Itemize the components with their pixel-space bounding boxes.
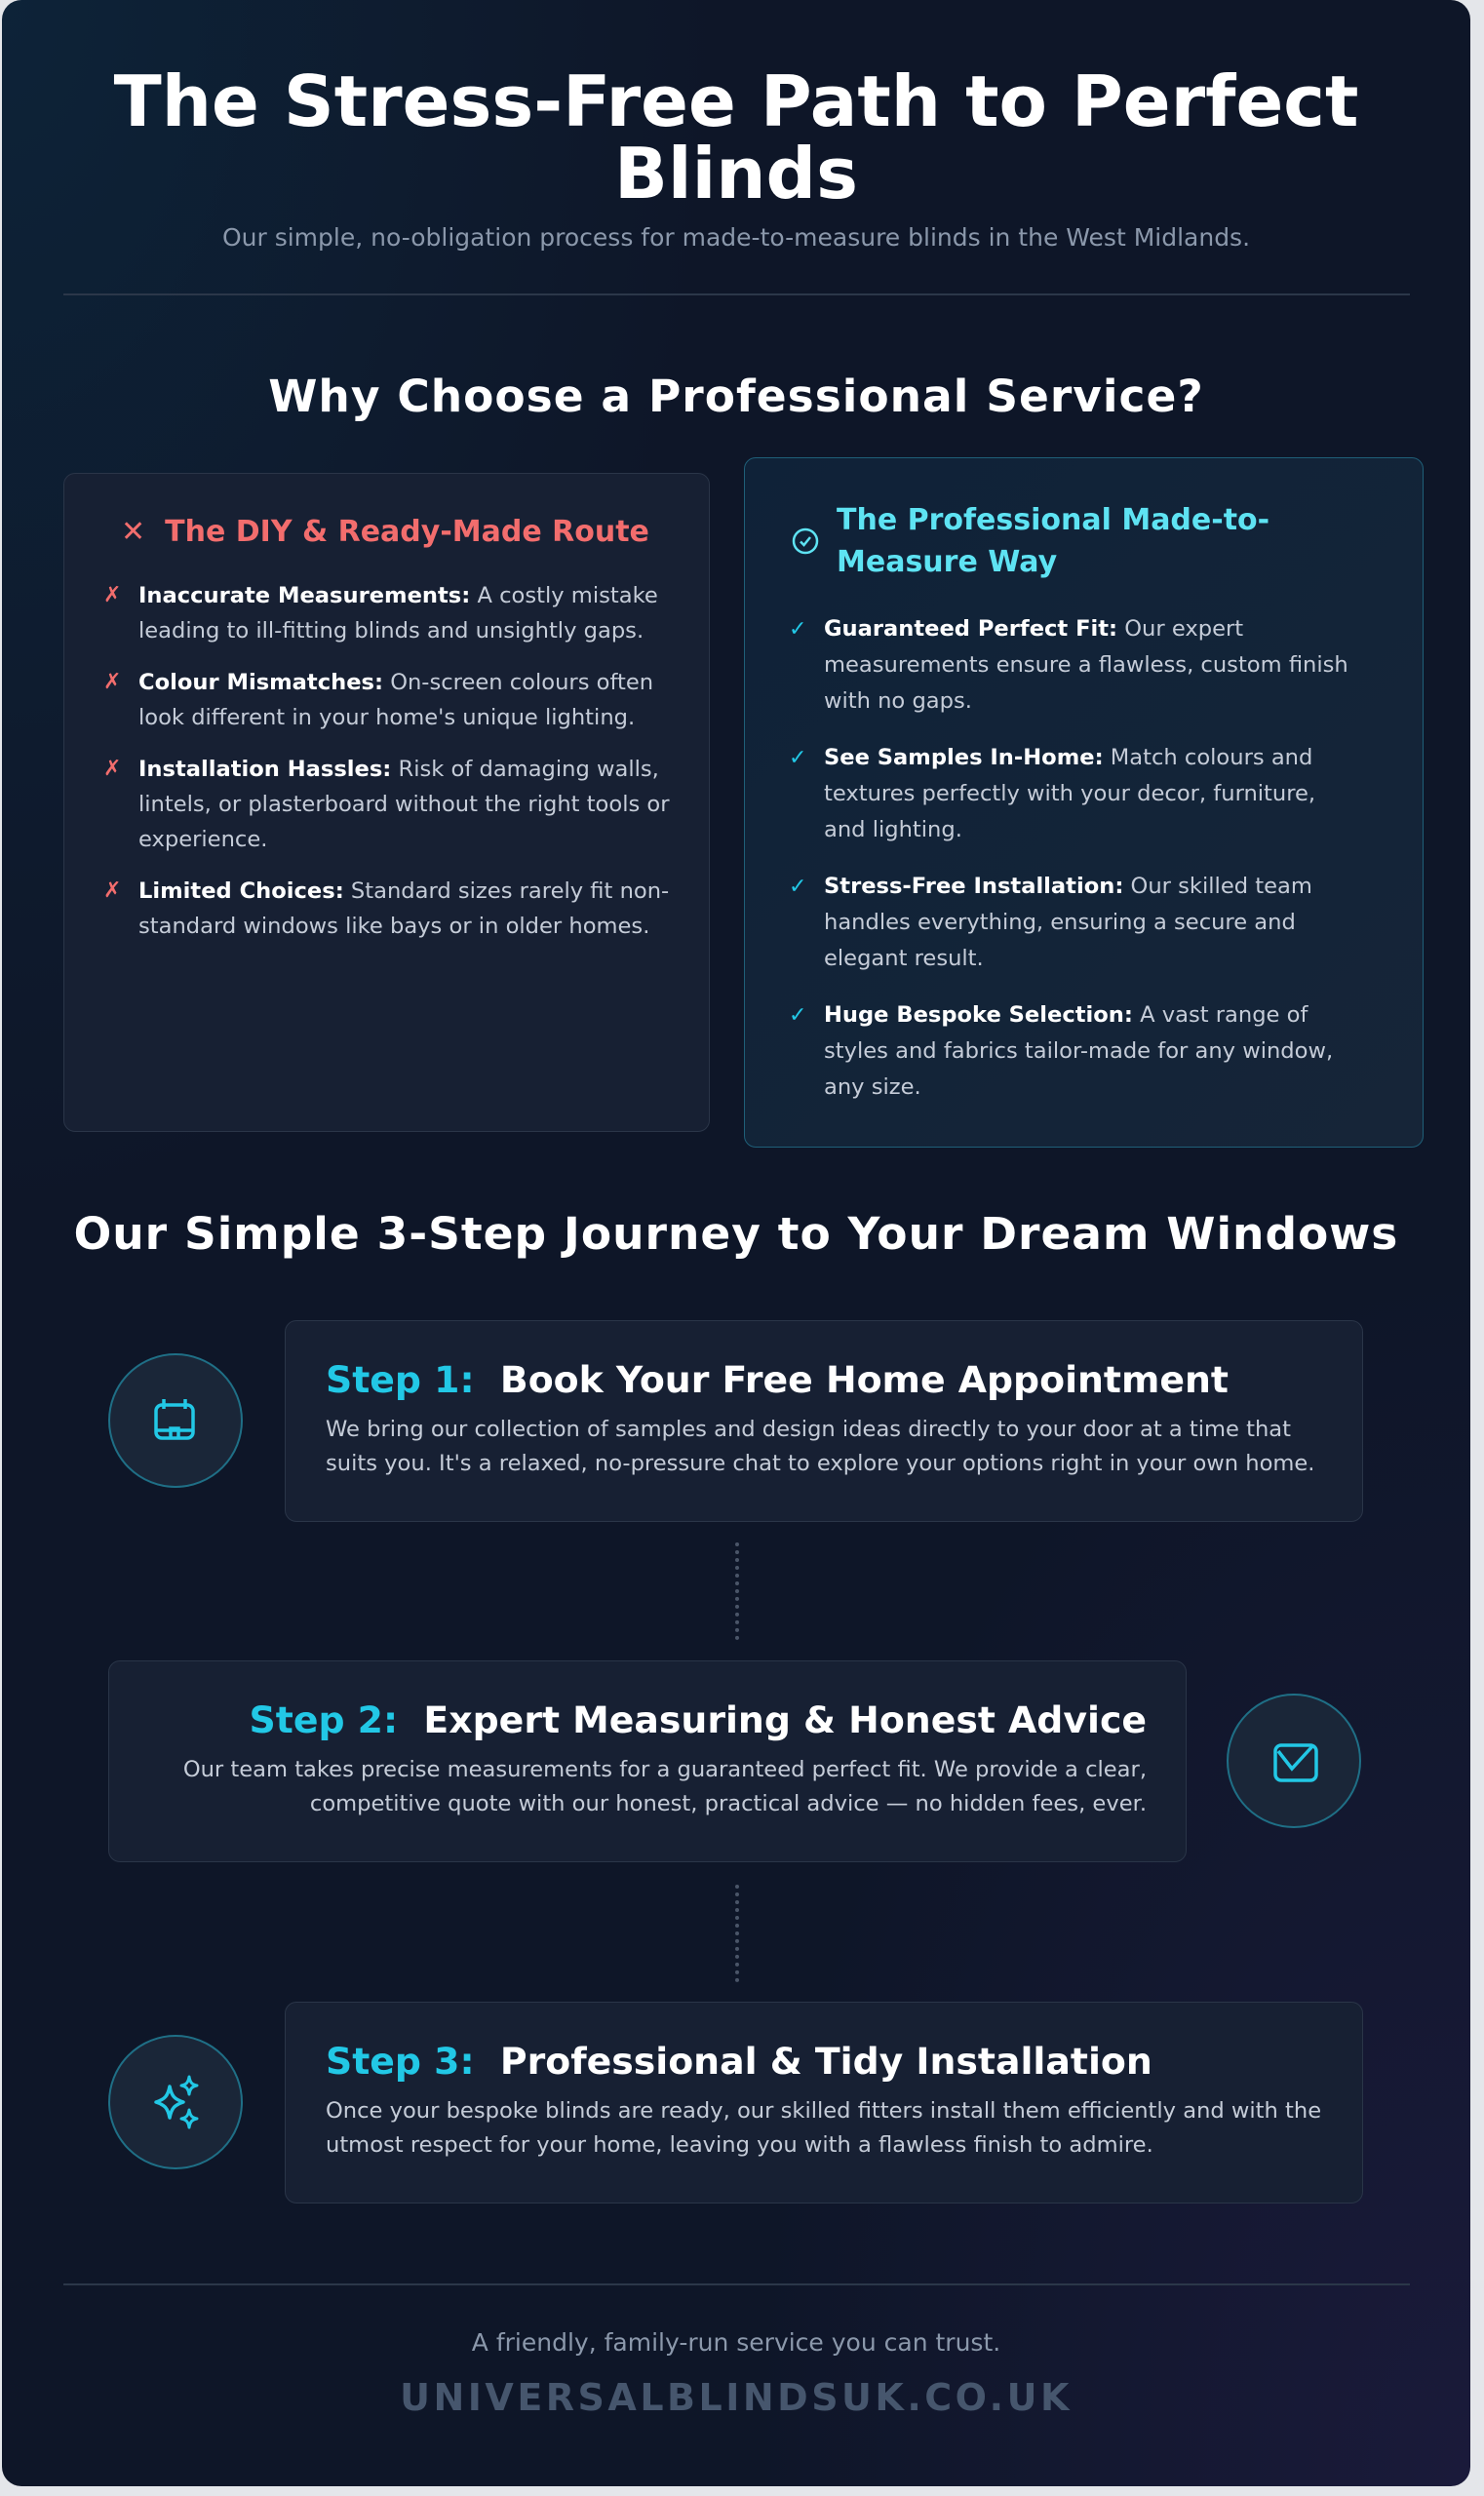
icon: calendar circle: [108, 1353, 243, 1488]
heading: 3-step journey: Our Simple 3-Step Journey to Your Dream Windows: [74, 1208, 1398, 1260]
icon: sparkles circle: [108, 2035, 243, 2169]
step 3 description: Once your bespoke blinds are ready, our skilled fitters install them efficiently and with the utmost respect for your home, leaving you with a flawless finish to admire.: [326, 2098, 1321, 2158]
item: inaccurate: Inaccurate Measurements: A costly mistake leading to ill-fitting blinds and unsightly gaps.: [138, 583, 658, 644]
title: Blinds: [614, 133, 858, 214]
panel: professional way: ✓: [789, 1003, 806, 1028]
step 1 title: Step 1: Book Your Free Home Appointment: [326, 1358, 1229, 1401]
step 2 description: Our team takes precise measurements for a guaranteed perfect fit. We provide a clear, competitive quote with our honest, practical advice — no hidden fees, ever.: [183, 1757, 1147, 1816]
panel: DIY route: ✗: [103, 583, 121, 607]
step 2 title: Step 2: Expert Measuring & Honest Advice: [250, 1698, 1147, 1741]
step 1 card: [285, 1320, 1363, 1522]
step 3 title: Step 3: Professional & Tidy Installation: [326, 2040, 1152, 2083]
step 1 description: We bring our collection of samples and design ideas directly to your door at a time that suits you. It's a relaxed, no-pressure chat to explore your options right in your own home.: [326, 1417, 1314, 1476]
item: installation: Installation Hassles: Risk of damaging walls, lintels, or plasterboard without the right tools or experience.: [138, 757, 670, 852]
step 2 card: [108, 1660, 1187, 1862]
heading: why choose: Why Choose a Professional Service?: [268, 370, 1204, 422]
panel: DIY route: [63, 473, 710, 1132]
panel heading: DIY: ✕ The DIY & Ready-Made Route: [121, 515, 649, 549]
footer tagline: A friendly, family-run service you can trust.: [472, 2328, 1000, 2357]
item: colour: Colour Mismatches: On-screen colours often look different in your home's unique lighting.: [138, 670, 653, 730]
panel heading: professional: The Professional Made-to-Measure Way: [837, 503, 1269, 579]
icon: envelope check circle: [1227, 1694, 1361, 1828]
item: stress-free: Stress-Free Installation: Our skilled team handles everything, ensuring a secure and elegant result.: [824, 874, 1312, 971]
panel: DIY route: ✗: [103, 757, 121, 781]
item: selection: Huge Bespoke Selection: A vast range of styles and fabrics tailor-made for any window, any size.: [824, 1002, 1333, 1100]
panel: professional way: ✓: [789, 617, 806, 642]
panel: DIY route: ✗: [103, 670, 121, 694]
icon: check circle: [792, 528, 819, 554]
panel: professional way: ✓: [789, 875, 806, 899]
item: samples: See Samples In-Home: Match colours and textures perfectly with your decor, furniture, and lighting.: [824, 745, 1315, 842]
footer website: UNIVERSALBLINDSUK.CO.UK: [400, 2376, 1073, 2419]
step 3 card: [285, 2002, 1363, 2204]
item: limited: Limited Choices: Standard sizes rarely fit non-standard windows like bays or in older homes.: [138, 878, 669, 939]
title: The Stress-Free Path to Perfect: [114, 60, 1358, 142]
panel: DIY route: ✗: [103, 878, 121, 903]
title: [113, 60, 1358, 214]
subtitle: Our simple, no-obligation process for made-to-measure blinds in the West Midlands.: [222, 223, 1250, 252]
panel: professional way: ✓: [789, 746, 806, 770]
item: fit: Guaranteed Perfect Fit: Our expert measurements ensure a flawless, custom finish with no gaps.: [824, 616, 1348, 714]
panel: professional way: [744, 457, 1424, 1148]
